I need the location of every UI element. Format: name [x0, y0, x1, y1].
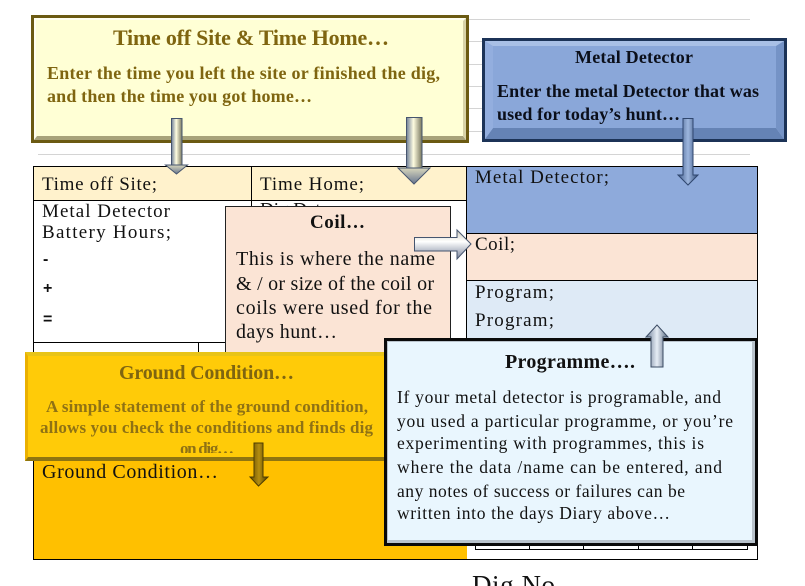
cell: lower left row: [34, 342, 228, 362]
callout: coil: [226, 206, 450, 352]
heading: Programme….: [505, 351, 635, 373]
body text: on dig…: [180, 439, 234, 458]
cell: dig date: [252, 200, 466, 342]
cell: program: [466, 280, 758, 342]
callout: ground condition: [25, 352, 387, 461]
callout: time off site and time home: [31, 15, 469, 143]
cell: metal detector: [466, 166, 758, 234]
arrow: to time off site: [166, 118, 188, 174]
body text: & / or size of the coil or: [236, 273, 434, 295]
cell: battery hours: -: [43, 251, 48, 268]
cell: battery hours: Battery Hours;: [42, 222, 171, 243]
heading: Ground Condition…: [119, 362, 294, 384]
cell: battery hours: +: [43, 280, 52, 297]
arrow: to time home: [398, 118, 430, 184]
cell: time off site: Time off Site;: [42, 174, 157, 195]
cell: coil: [466, 234, 758, 280]
body text: used for today’s hunt…: [497, 104, 680, 124]
heading: Coil…: [310, 212, 365, 233]
body text: you used a particular programme, or you’re: [397, 411, 733, 431]
arrow: to ground condition: [250, 443, 268, 486]
cell: battery hours: =: [43, 311, 52, 328]
callout: metal detector: [482, 38, 787, 142]
arrow: to coil: [414, 230, 471, 259]
cell: dig date: Dig Date;: [260, 200, 334, 220]
body text: [40, 400, 373, 453]
callout: programme: [384, 338, 758, 546]
body text: written into the days Diary above…: [397, 503, 670, 523]
cell: ground condition: [34, 455, 467, 560]
cell: time home: [252, 166, 466, 200]
body text: [397, 387, 733, 523]
body text: If your metal detector is programable, and: [397, 387, 721, 407]
cell: time off site: [34, 166, 252, 200]
cell: battery hours: Metal Detector: [42, 201, 171, 222]
cell: metal detector: Metal Detector;: [475, 167, 609, 188]
arrow: to metal detector: [678, 118, 698, 185]
body text: where the data /name can be entered, and: [397, 457, 722, 477]
body text: A simple statement of the ground condition,: [46, 397, 368, 416]
body text: [497, 81, 759, 124]
heading: Metal Detector: [575, 47, 693, 67]
cell: lower right: [466, 342, 758, 560]
cell: time home: Time Home;: [260, 174, 364, 195]
body text: [47, 63, 440, 106]
body text: days hunt…: [236, 321, 337, 343]
arrow: to program: [646, 325, 668, 367]
form table: [34, 166, 758, 560]
body text: any notes of success or failures can be: [397, 481, 685, 501]
cell: program: Program;: [475, 282, 554, 303]
body text: [236, 248, 435, 343]
heading: Time off Site & Time Home…: [113, 25, 389, 50]
body text: and then the time you got home…: [47, 86, 312, 106]
body text: experimenting with programmes, this is: [397, 433, 704, 453]
body text: Enter the metal Detector that was: [497, 81, 759, 101]
cell: program: Program;: [475, 310, 554, 331]
body text: This is where the name: [236, 248, 435, 270]
cell: ground condition: Ground Condition…: [42, 461, 218, 483]
body text: Enter the time you left the site or finished the dig,: [47, 63, 440, 83]
body text: allows you check the conditions and finds dig: [40, 418, 374, 437]
cell: battery hours: [34, 200, 252, 342]
cell: coil: Coil;: [475, 234, 515, 255]
body text: coils were used for the: [236, 297, 432, 319]
